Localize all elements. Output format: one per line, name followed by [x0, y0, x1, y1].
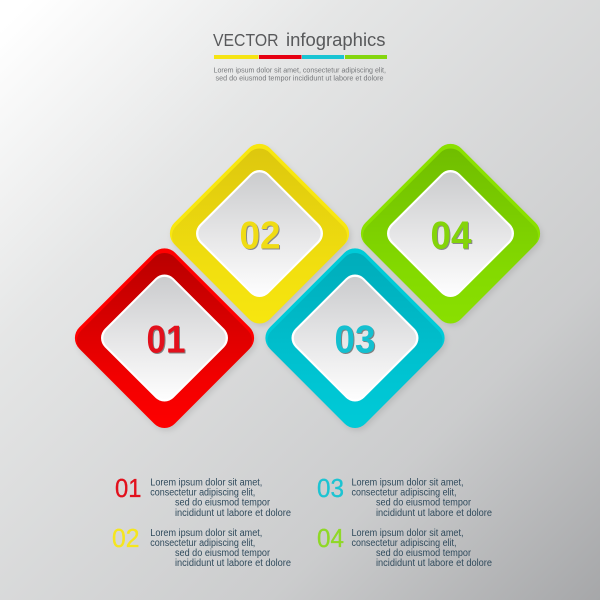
subtitle — [214, 66, 386, 82]
title — [213, 29, 386, 50]
legend item 03: sed do eiusmod tempor — [376, 498, 472, 509]
legend item 02: sed do eiusmod tempor — [175, 548, 271, 559]
number 02: 02 — [240, 214, 280, 258]
colour bar under title — [214, 55, 387, 59]
title: infographics — [286, 29, 386, 50]
number 02: 02 — [240, 216, 282, 258]
legend item 01: sed do eiusmod tempor — [175, 498, 271, 509]
legend item 04: incididunt ut labore et dolore — [376, 558, 493, 569]
legend item 02 — [112, 525, 292, 569]
legend item 01: Lorem ipsum dolor sit amet, — [150, 478, 262, 488]
legend item 03: incididunt ut labore et dolore — [376, 508, 493, 519]
subtitle: Lorem ipsum dolor sit amet, consectetur adipiscing elit, — [214, 66, 386, 74]
panel: diamond 01 red — [69, 242, 262, 437]
panel: diamond 03 blue — [259, 242, 453, 437]
number 03: 03 — [334, 318, 376, 362]
legend item 04: sed do eiusmod tempor — [376, 548, 472, 559]
legend item 01: 01 — [115, 475, 142, 503]
number 04: 04 — [432, 216, 473, 258]
title: VECTOR — [213, 30, 278, 50]
legend item 01 — [115, 475, 292, 519]
legend item 02: Lorem ipsum dolor sit amet, — [150, 528, 262, 539]
legend item 03 — [317, 475, 493, 519]
panel: diamond 02 yellow — [164, 138, 357, 332]
subtitle: sed do eiusmod tempor incididunt ut labore et dolore — [216, 74, 384, 82]
legend item 03: 03 — [317, 475, 344, 503]
legend item 02: consectetur adipiscing elit, — [150, 538, 255, 549]
legend item 03: Lorem ipsum dolor sit amet, — [352, 478, 464, 488]
legend item 04: Lorem ipsum dolor sit amet, — [352, 528, 464, 539]
legend item 03: consectetur adipiscing elit, — [352, 488, 456, 498]
legend item 02: incididunt ut labore et dolore — [175, 558, 292, 569]
legend item 02: 02 — [112, 525, 140, 553]
legend item 01: incididunt ut labore et dolore — [175, 508, 292, 519]
number 04: 04 — [430, 214, 472, 258]
legend item 04: consectetur adipiscing elit, — [352, 538, 456, 549]
number 03: 03 — [336, 320, 376, 362]
legend item 01: consectetur adipiscing elit, — [150, 488, 255, 498]
legend item 04 — [317, 525, 493, 569]
number 01: 01 — [148, 320, 186, 362]
legend item 04: 04 — [317, 525, 344, 553]
number 01: 01 — [146, 318, 186, 362]
panel: diamond 04 green — [355, 138, 548, 332]
